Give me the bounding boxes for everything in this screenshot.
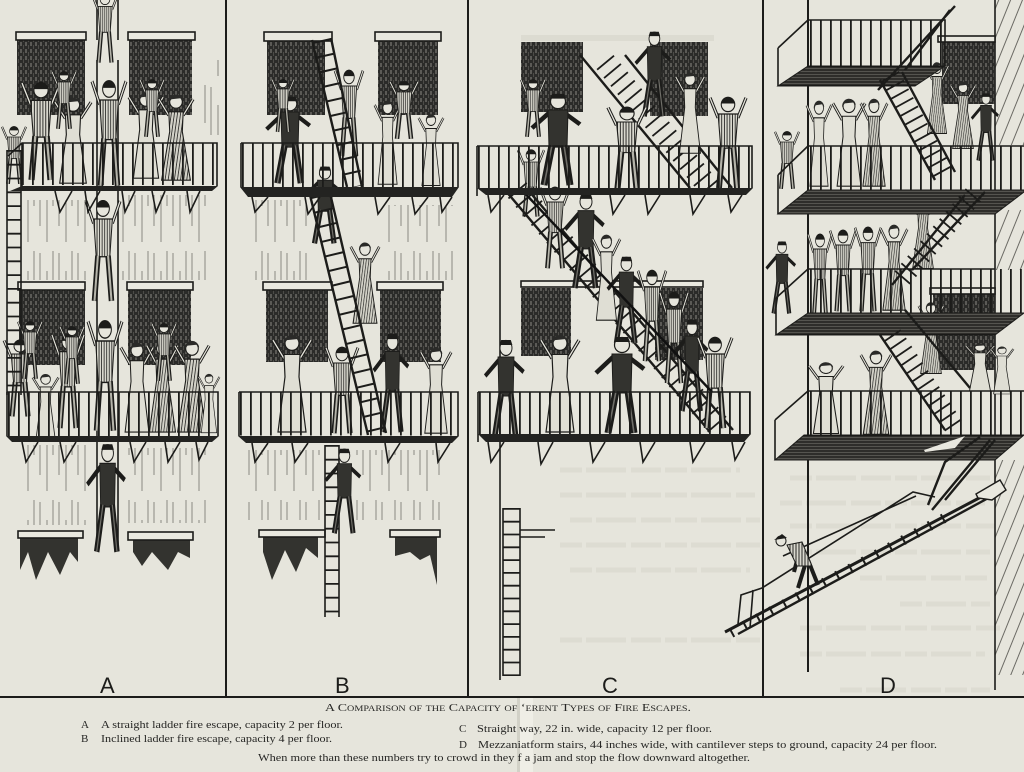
balcony A1 xyxy=(8,143,218,212)
balcony B2 xyxy=(238,392,459,462)
balcony C2 xyxy=(478,392,751,464)
balcony A2 xyxy=(6,392,219,462)
label A: A xyxy=(100,673,115,698)
cantilever steps to ground D xyxy=(725,436,1006,634)
item C: Straight way, 22 in. wide, capacity 12 per floor. xyxy=(477,723,712,735)
wall shading B xyxy=(245,200,455,520)
wall pipe C xyxy=(499,190,501,680)
panel B: inclined ladder xyxy=(238,32,459,698)
crowd C upper xyxy=(518,32,746,217)
left ladder A xyxy=(7,150,21,395)
windows B xyxy=(259,32,443,585)
item D: Mezzaniatform stairs, 44 inches wide, with cantilever steps to ground, capacity 24 per floor. xyxy=(478,739,937,751)
inclined ladders B xyxy=(310,38,386,435)
closing note: When more than these numbers try to crowd in they f a jam and stop the flow downward altogether. xyxy=(258,752,750,764)
caption xyxy=(81,702,937,764)
floors D xyxy=(775,66,1024,460)
item C: C xyxy=(459,723,466,735)
panel A: straight ladder xyxy=(2,0,220,698)
panel C: straight stairway xyxy=(477,32,753,698)
vertical ladder C xyxy=(503,508,555,676)
central ladder A xyxy=(97,0,118,550)
panel D: mezzanine platform stairs xyxy=(725,0,1024,698)
item B: Inclined ladder fire escape, capacity 4 per floor. xyxy=(101,733,332,745)
label D: D xyxy=(880,673,896,698)
windows A xyxy=(16,32,195,580)
crowd B upper xyxy=(267,70,443,186)
crowd on stairs C xyxy=(520,187,732,428)
main stairs C xyxy=(505,190,733,432)
building side D xyxy=(930,0,1024,690)
item B: B xyxy=(81,733,88,745)
crowd A upper xyxy=(2,0,193,186)
label C: C xyxy=(602,673,618,698)
crowd B lower xyxy=(273,167,451,433)
climber and vertical ladder B xyxy=(325,445,360,617)
show-through text from the reverse page xyxy=(560,470,1000,690)
railings D xyxy=(775,20,1024,460)
windows C xyxy=(521,35,714,360)
person on steps D xyxy=(774,534,818,588)
upper stairs C xyxy=(580,55,732,188)
stairs between floors D xyxy=(878,6,985,430)
crowd A lower xyxy=(4,320,219,439)
item D: D xyxy=(459,739,467,751)
fold in the page xyxy=(517,697,533,772)
item A: A xyxy=(81,719,89,731)
item A: A straight ladder fire escape, capacity 2 per floor. xyxy=(101,719,343,731)
label B: B xyxy=(335,673,350,698)
balcony C1 xyxy=(477,146,753,214)
caption title: A Comparison of the Capacity of ‘erent Types of Fire Escapes. xyxy=(325,702,691,714)
crowd C lower xyxy=(485,335,644,436)
balcony B1 xyxy=(240,143,459,214)
climbers A xyxy=(86,200,125,552)
wall shading A xyxy=(22,60,220,525)
crowd D xyxy=(766,62,1013,434)
